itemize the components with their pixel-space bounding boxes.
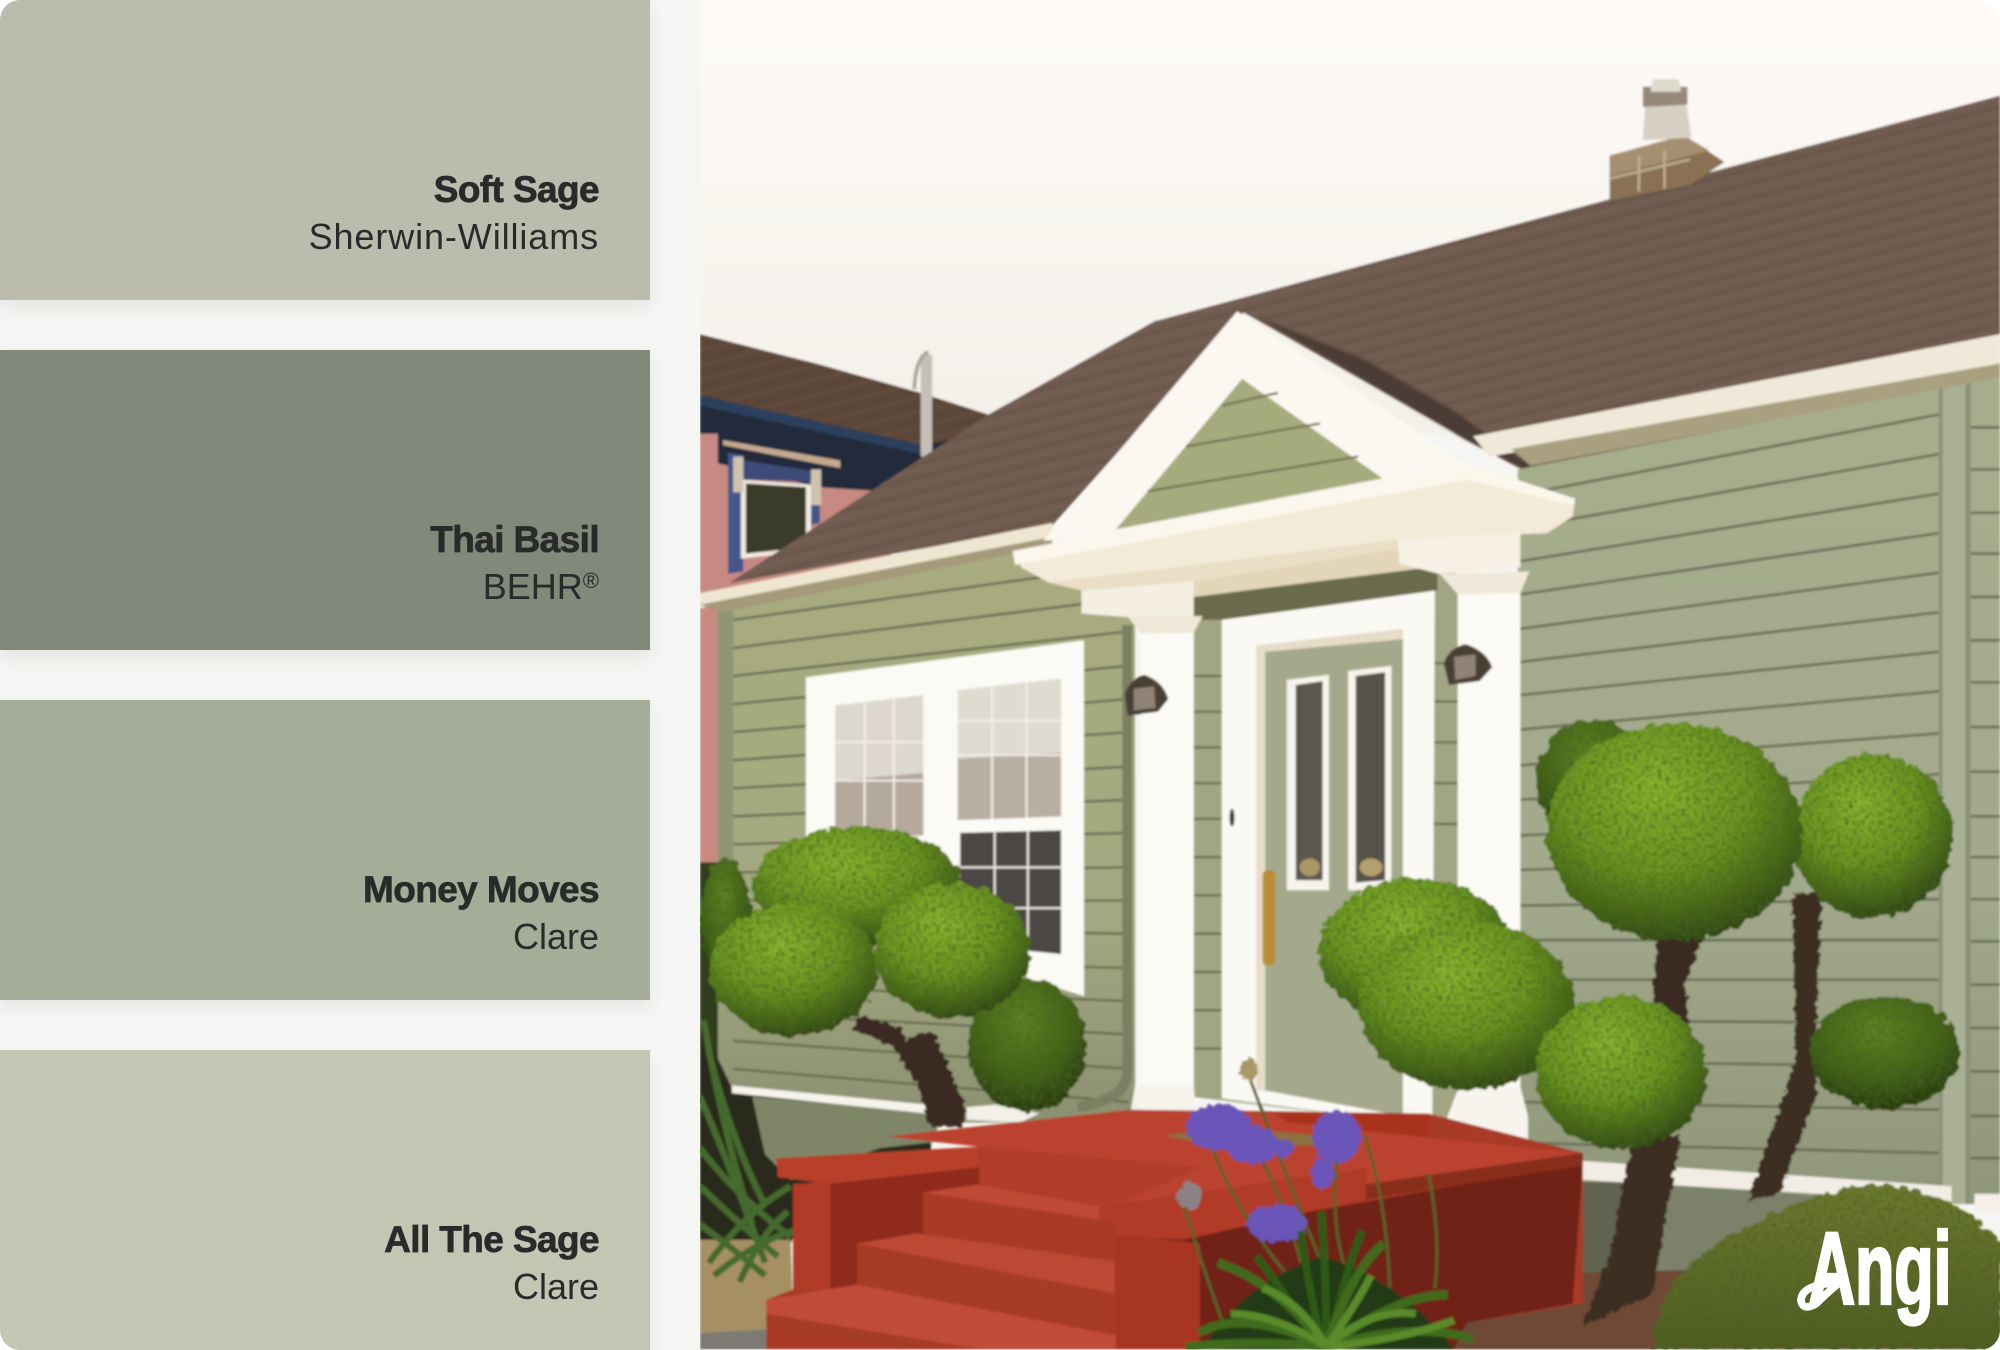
porch cornice [1013, 464, 1575, 617]
red porch steps [766, 1110, 1583, 1349]
swatch name: All The Sage: All The Sage [384, 1219, 599, 1260]
swatch: Thai Basil [0, 350, 650, 650]
agapanthus leaves [1186, 1212, 1473, 1349]
bottom right shrub [1653, 1186, 2000, 1349]
left wall with siding [700, 434, 1135, 1130]
dark soffit over door [1194, 564, 1437, 620]
house scene [700, 0, 2000, 1349]
swatch: Soft Sage [0, 0, 650, 300]
left topiary [700, 827, 1087, 1126]
main roof [729, 96, 2000, 583]
lower left foundation and dark planting bed [700, 1020, 1039, 1244]
gable [1043, 311, 1467, 541]
right wall with siding [1518, 375, 2000, 1205]
swatch name: Money Moves: Money Moves [363, 869, 599, 910]
left foreground plant [700, 1020, 793, 1282]
sky [700, 0, 2000, 434]
brand: Sherwin-Williams: Sherwin-Williams [309, 216, 599, 257]
brand: Clare: Clare [513, 916, 599, 957]
swatch name: Thai Basil: Thai Basil [430, 519, 599, 560]
brand: BEHR: BEHR® [483, 566, 599, 607]
roof valley shadow [1256, 316, 1556, 485]
photo: house with sage green siding [700, 2, 2000, 1350]
right topiary [1536, 719, 1960, 1327]
porch recess siding [1194, 564, 1458, 1129]
agapanthus purple blooms [1177, 1057, 1361, 1242]
wall lamp left [1125, 675, 1168, 716]
chimney [1610, 79, 1724, 200]
right foundation and trim [1576, 1161, 2000, 1276]
brand: Clare: Clare [513, 1266, 599, 1307]
right column [1440, 571, 1529, 1147]
centre topiary [1319, 879, 1575, 1089]
swatch: Money Moves [0, 700, 650, 1000]
left column [1127, 616, 1203, 1116]
eaves and gutters [700, 334, 2000, 612]
wall lamp right [1444, 644, 1492, 685]
agapanthus flower stems [1180, 1071, 1437, 1327]
door [1229, 629, 1403, 1116]
ground [700, 1240, 2000, 1349]
swatch name: Soft Sage: Soft Sage [434, 169, 599, 210]
window [806, 640, 1084, 996]
porch siding lines [1194, 663, 1458, 1048]
door frame [1222, 591, 1435, 1126]
downpipe [1078, 625, 1127, 1107]
neighbouring pink house [700, 334, 988, 867]
swatch: All The Sage [0, 1050, 650, 1350]
